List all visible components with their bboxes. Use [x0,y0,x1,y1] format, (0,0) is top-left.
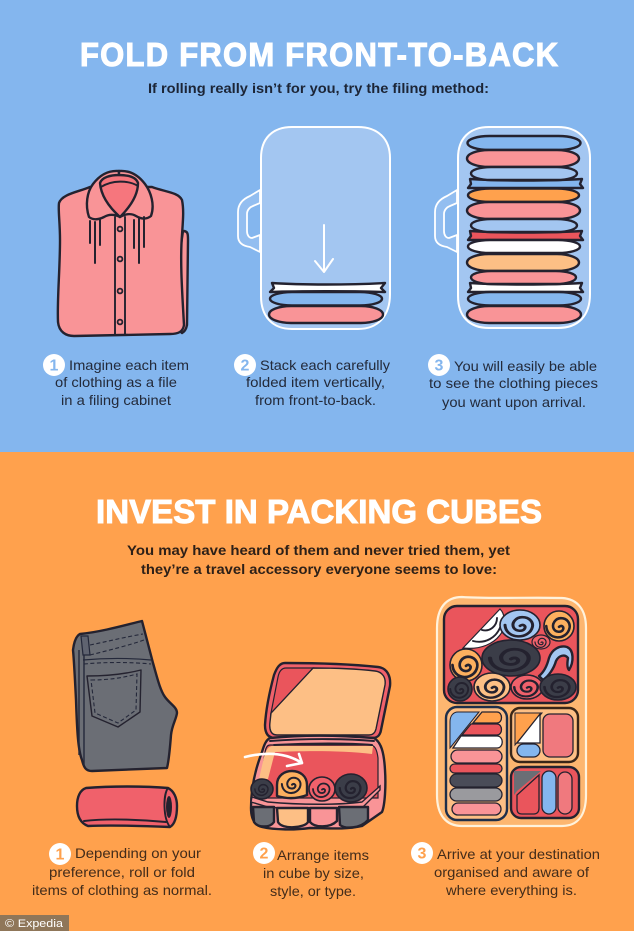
step 3: see the clothing: you want upon arrival. [442,394,586,410]
step 2: stack each item: 2 [241,358,250,374]
icon: down arrow [315,225,333,272]
icon: white curved arrow [245,754,302,766]
illustration: suitcase with three folded items [238,127,390,329]
step 1: depending on your preference [32,843,212,898]
step 3: see the clothing: You will easily be able [454,358,597,374]
step 3: see the clothing: 3 [435,358,444,374]
step 2: stack each item: Stack each carefully [260,357,390,373]
cube: right bottom compartment [511,767,579,818]
panel: invest in packing cubes [0,452,634,931]
step 1: depending on your preference: items of clothing as normal. [32,882,212,898]
rolled clothes [251,771,367,802]
icon: rolled item [77,786,177,827]
step 2: arrange items [253,842,369,899]
base [251,736,385,829]
intro text: packing cubes: they’re a travel accessory everyone seems to love: [141,561,497,577]
step 2: arrange items: Arrange items [277,847,369,863]
step 1: imagine each item: Imagine each item [69,357,189,373]
step 3: arrive at your destination: organised and aware of [434,864,589,880]
step 2: stack each item: from front-to-back. [255,392,376,408]
lid [265,663,390,738]
step 3: see the clothing [428,354,598,410]
step 1: depending on your preference: Depending on your [75,845,201,861]
step 3: arrive at your destination [411,842,600,898]
panel: fold from front-to-back [0,0,634,452]
cube: right top compartment [511,708,578,762]
heading: fold from front-to-back: FOLD FROM FRONT-TO-BACK [80,36,558,73]
heading: invest in packing cubes: INVEST IN PACKING CUBES [96,493,542,530]
step 2: arrange items: style, or type. [270,883,356,899]
step 2: arrange items: 2 [260,846,269,862]
step 3: arrive at your destination: Arrive at your destination [437,846,600,862]
intro text: packing cubes [127,542,510,577]
step 3: see the clothing: to see the clothing pieces [429,375,598,391]
intro text: packing cubes: You may have heard of them and never tried them, yet [127,542,510,558]
step 1: imagine each item: 1 [50,358,59,374]
illustration: organised suitcase with cubes [437,597,586,826]
intro text: filing method: If rolling really isn’t for you, try the filing method: [148,80,489,96]
illustration: folded jeans [73,621,177,827]
cube: left compartment [446,707,507,820]
step 2: stack each item [234,354,390,408]
step 1: imagine each item: in a filing cabinet [61,392,171,408]
step 3: arrive at your destination: 3 [418,846,427,862]
step 1: imagine each item [43,354,189,408]
step 1: depending on your preference: preference, roll or fold [49,864,195,880]
step 1: imagine each item: of clothing as a file [55,374,177,390]
step 1: depending on your preference: 1 [56,846,65,864]
step 3: arrive at your destination: where everything is. [445,882,577,898]
illustration: folded shirt [58,171,188,336]
cube: top compartment [444,606,578,703]
credit: Expedia: © Expedia [5,918,64,930]
illustration: open packing cube [245,663,390,829]
illustration: full suitcase of filed clothes [435,127,590,328]
step 2: arrange items: in cube by size, [263,865,364,881]
step 2: stack each item: folded item vertically, [246,374,385,390]
credit: Expedia [0,915,69,931]
